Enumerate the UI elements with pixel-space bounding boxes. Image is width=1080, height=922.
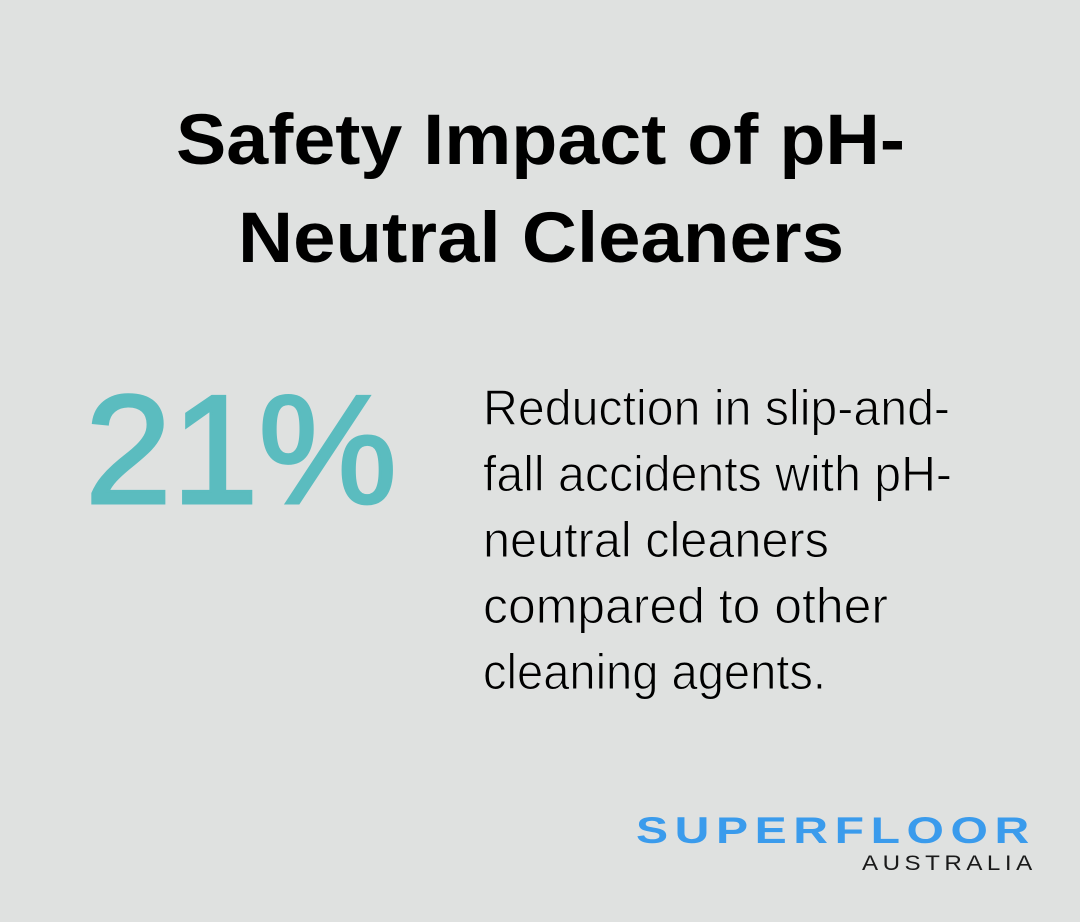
logo: Superfloor Australia: SUPERFLOOR xyxy=(636,810,1029,852)
big statistic: 21%: 21% xyxy=(85,363,397,536)
logo: Superfloor Australia: AUSTRALIA xyxy=(862,851,1033,875)
description text: Reduction in slip-and- xyxy=(483,380,950,436)
description text xyxy=(483,380,952,700)
title: Safety Impact of pH- xyxy=(176,101,905,180)
title: Neutral Cleaners xyxy=(238,199,844,278)
description text: cleaning agents. xyxy=(483,644,826,700)
logo: Superfloor Australia xyxy=(636,810,1033,875)
description text: compared to other xyxy=(483,578,888,634)
description text: fall accidents with pH- xyxy=(483,446,952,502)
title xyxy=(176,101,905,278)
description text: neutral cleaners xyxy=(483,512,829,568)
